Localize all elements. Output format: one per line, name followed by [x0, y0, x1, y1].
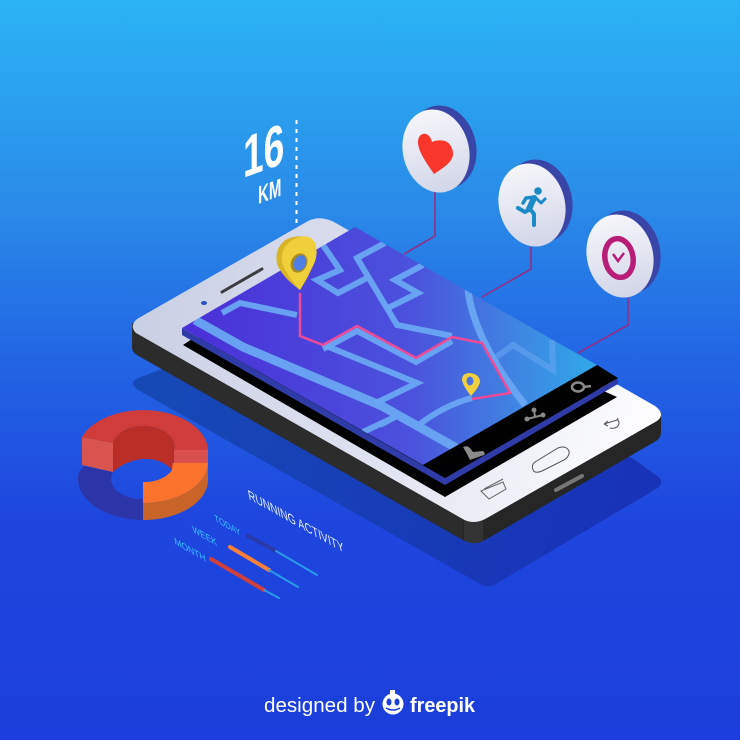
camera dot: [201, 301, 207, 305]
speaker: [222, 269, 262, 292]
footer credit: [264, 690, 476, 717]
segment: red left cut: [82, 437, 113, 472]
designed by: designed by: [264, 695, 375, 717]
badge: runner: [490, 152, 581, 254]
phone top face: [133, 218, 661, 522]
connector: clock: [578, 298, 628, 353]
distance label: 16 km: [243, 110, 296, 224]
phone left side highlight: [132, 323, 463, 540]
bottom navigation bar: [423, 365, 618, 478]
connector: runner: [482, 247, 531, 297]
button: back: [604, 419, 619, 428]
label: month: MONTH: [173, 536, 207, 565]
running activity legend: [173, 486, 346, 598]
bar: today: [248, 536, 317, 575]
large location pin: [276, 236, 317, 290]
nav icon: search: [572, 382, 591, 392]
icon: clock check: [602, 236, 636, 280]
icon: heart: [418, 134, 453, 174]
icon: runner: [518, 187, 545, 225]
freepik: freepik: [410, 695, 476, 717]
bar: month: [211, 559, 279, 598]
nav icon: share: [526, 408, 544, 420]
icon: freepik robot: [382, 690, 404, 714]
button: home: [532, 447, 569, 472]
badge: heart: [394, 98, 485, 200]
screen edge: [182, 328, 618, 485]
dotted distance line: [296, 120, 298, 224]
map roads: [195, 243, 553, 450]
map screen: [182, 227, 618, 485]
phone body side: [132, 323, 661, 543]
phone shadow: [133, 368, 661, 586]
unit KM: KM: [258, 174, 281, 210]
segment: orange top: [143, 463, 208, 503]
segment: blue: [78, 466, 143, 520]
connector: heart: [404, 192, 435, 254]
segment: red right cut: [174, 450, 208, 463]
map base: [182, 227, 597, 465]
button: recent apps: [481, 479, 506, 499]
donut chart: [78, 410, 208, 520]
segment: orange side: [143, 463, 208, 520]
legend title: RUNNING ACTIVITY: [246, 486, 346, 556]
bar: week: [230, 547, 298, 587]
small location pin: [462, 373, 480, 396]
label: today: TODAY: [213, 513, 242, 539]
label: week: WEEK: [191, 524, 218, 549]
segment: red inner wall: [113, 426, 174, 472]
badge: clock: [578, 203, 669, 305]
screen black shadow: [183, 300, 617, 497]
segment: red top: [82, 410, 208, 450]
phone: [132, 218, 661, 543]
nav icon: person: [463, 446, 485, 460]
number 16: 16: [243, 110, 284, 191]
running route: [300, 293, 510, 399]
phone bottom corner facet: [464, 518, 483, 543]
charging port: [556, 476, 582, 490]
